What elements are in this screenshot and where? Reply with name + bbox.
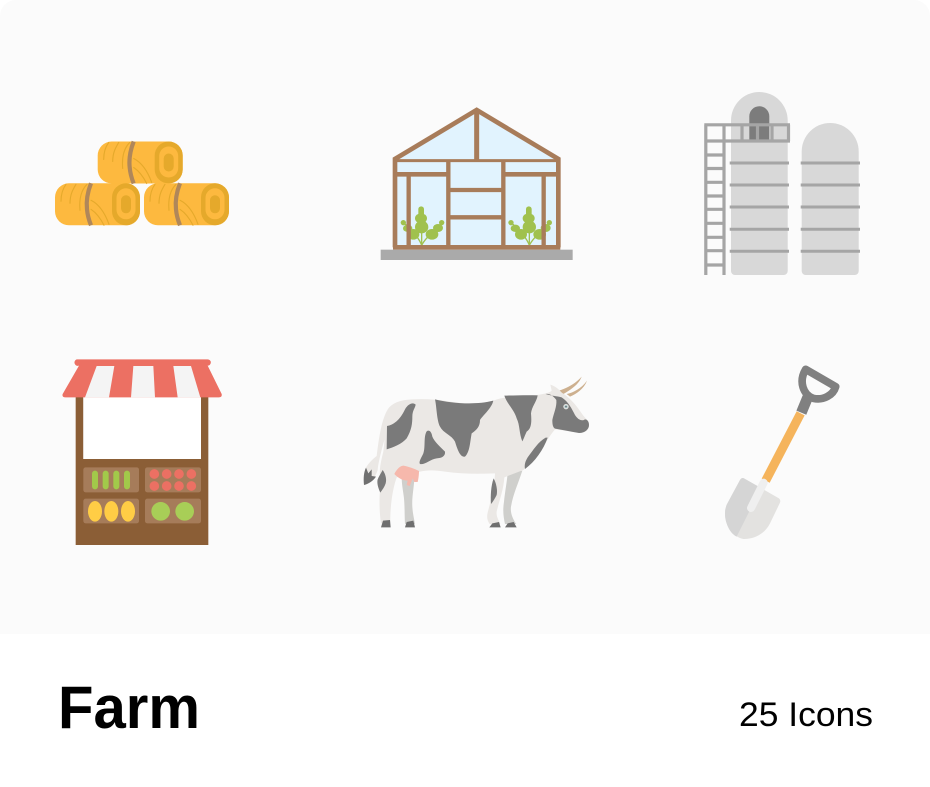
awning (62, 359, 222, 397)
icon: market stall (62, 359, 222, 545)
far legs (402, 477, 415, 524)
silo door (749, 106, 769, 140)
body (379, 385, 589, 524)
silo: left (731, 92, 788, 275)
melons (151, 502, 194, 521)
icon count: 25 Icons (739, 696, 873, 734)
icon: greenhouse (381, 110, 573, 260)
silo: right (802, 123, 859, 275)
stall frame (76, 397, 208, 545)
icon: cow (364, 377, 589, 527)
udder (394, 466, 419, 486)
shovel blade (725, 478, 780, 539)
icon: shovel (725, 369, 836, 539)
lemons (88, 501, 135, 522)
hooves (381, 520, 517, 527)
tomatoes (149, 469, 196, 491)
title: Farm (58, 674, 200, 741)
stall window (83, 397, 201, 459)
greenhouse glass (395, 110, 558, 247)
icon: silos (704, 92, 860, 275)
tail (364, 410, 388, 485)
plant: left (401, 206, 444, 245)
railing and ladder (704, 125, 790, 275)
shovel socket (751, 483, 764, 508)
silo bands (730, 163, 860, 251)
cucumbers (92, 471, 130, 489)
spots (377, 394, 589, 504)
greenhouse frame (393, 110, 560, 247)
horns (559, 377, 587, 397)
awning stripes (85, 366, 200, 397)
shovel handle grip (802, 369, 836, 399)
eye (563, 404, 569, 409)
icon: hay bales (55, 142, 229, 225)
produce crates (83, 467, 201, 523)
greenhouse base (381, 250, 573, 260)
shovel collar (801, 397, 808, 413)
plant: right (508, 206, 552, 245)
shovel shaft (766, 413, 801, 481)
